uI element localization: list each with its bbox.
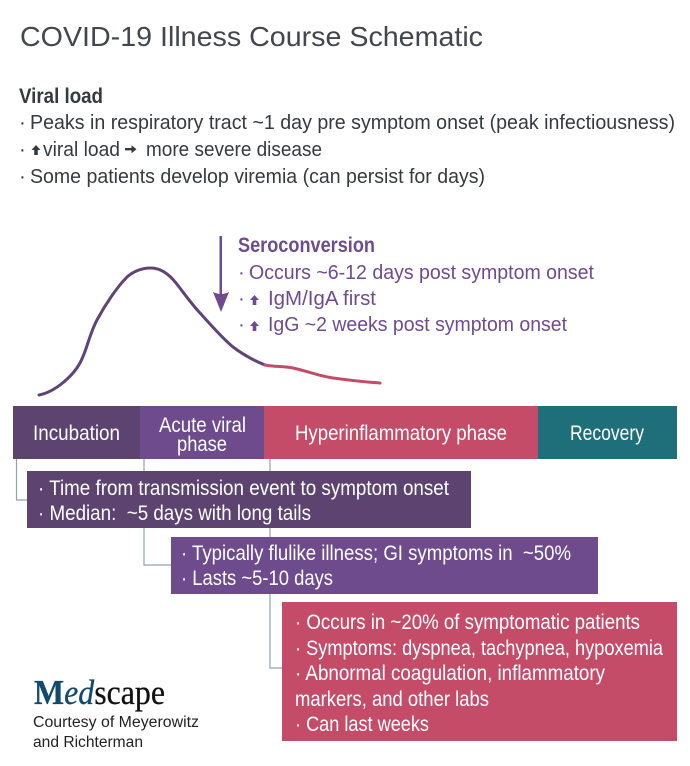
bullet: IgG: IgG ~2 weeks post symptom onset <box>268 313 567 336</box>
bullet: peaks: Peaks in respiratory tract ~1 day pre symptom onset (peak infectiousness) <box>30 111 675 134</box>
text block: seroconversion <box>238 234 594 336</box>
bullet: timing: · <box>238 261 245 284</box>
bullet: viremia: · <box>19 165 26 188</box>
bullet: timing: Occurs ~6-12 days post symptom onset <box>249 261 594 284</box>
panel: hyperinflammatory details: · Can last weeks <box>295 713 429 736</box>
credit: Courtesy of Meyerowitz <box>33 714 199 731</box>
bullet: IgG: · <box>238 313 245 336</box>
panel: hyperinflammatory details: · Occurs in ~20% of symptomatic patients <box>295 611 640 634</box>
phase: hyperinflammatory: Hyperinflammatory phase <box>295 422 507 445</box>
viral load curve <box>39 268 380 395</box>
bullet: viral load severity <box>19 138 322 161</box>
panel: incubation details <box>27 471 471 528</box>
bullet: IgM/IgA: IgM/IgA first <box>268 287 376 310</box>
panel: hyperinflammatory details: markers, and other labs <box>295 688 489 711</box>
heading: viral load: Viral load <box>19 85 103 108</box>
phase: recovery: Recovery <box>570 422 644 445</box>
panel: acute viral details <box>171 537 598 594</box>
bullet: viral load severity: · <box>19 138 26 161</box>
text block: viral load <box>19 85 675 188</box>
bullet: peaks: · <box>19 111 26 134</box>
phase: recovery <box>538 406 677 459</box>
phase: hyperinflammatory <box>264 406 538 459</box>
title: COVID-19 Illness Course Schematic <box>20 21 483 52</box>
phase: acute viral: Acute viral <box>159 414 246 437</box>
panel: incubation details: · Time from transmission event to symptom onset <box>38 477 449 500</box>
arrow: seroconversion <box>213 236 229 312</box>
bullet: viral load severity: viral load <box>43 138 120 161</box>
credit <box>33 714 199 751</box>
phase bar <box>13 406 677 459</box>
heading: seroconversion: Seroconversion <box>238 234 375 257</box>
panel: acute viral details: · Lasts ~5-10 days <box>181 567 333 590</box>
logo: Medscape: Medscape <box>34 673 165 712</box>
panel: acute viral details: · Typically flulike illness; GI symptoms in ~50% <box>181 542 571 565</box>
panel: incubation details: · Median: ~5 days with long tails <box>38 502 311 525</box>
panel: hyperinflammatory details <box>282 602 677 741</box>
phase: acute viral <box>140 406 264 459</box>
bullet: IgM/IgA: · <box>238 287 245 310</box>
bullet: viral load severity: more severe disease <box>146 138 322 161</box>
panel: hyperinflammatory details: · Abnormal coagulation, inflammatory <box>295 662 605 685</box>
credit: and Richterman <box>33 734 143 751</box>
connector lines <box>16 459 282 668</box>
bullet: viremia: Some patients develop viremia (can persist for days) <box>30 165 485 188</box>
phase: incubation <box>13 406 140 459</box>
phase: acute viral: phase <box>177 433 227 456</box>
phase: incubation: Incubation <box>33 422 120 445</box>
